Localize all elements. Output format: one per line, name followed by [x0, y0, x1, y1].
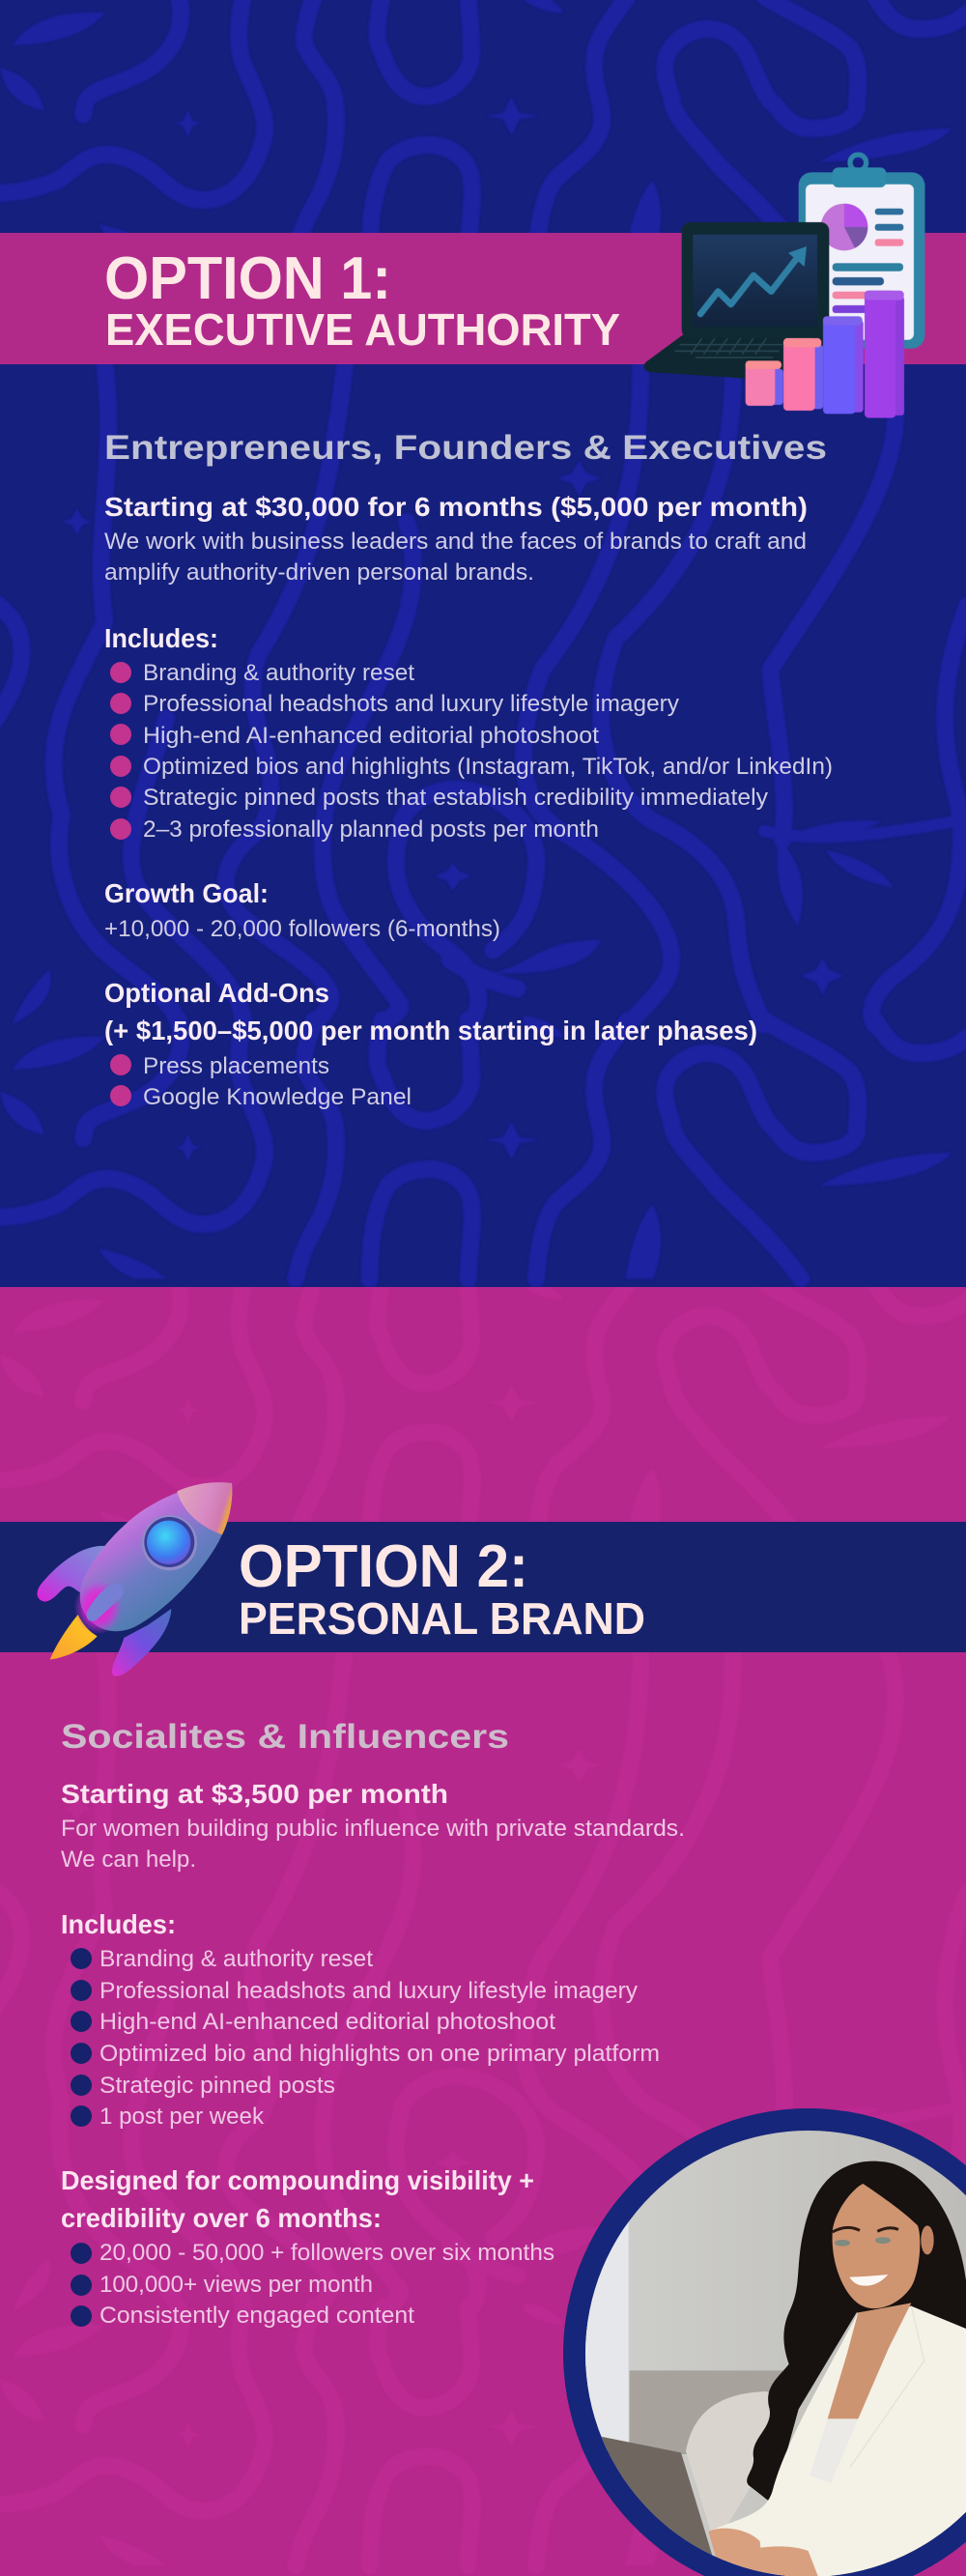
heading: executive authority: EXECUTIVE AUTHORITY [105, 304, 620, 355]
description: We can help. [61, 1846, 196, 1873]
audience heading: Entrepreneurs, Founders & Executives [104, 429, 827, 467]
laptop [643, 222, 829, 379]
bar chart [746, 291, 904, 417]
includes heading: Includes: [61, 1909, 176, 1939]
portrait photo in navy circle [563, 2108, 966, 2576]
results heading: credibility over 6 months: [61, 2203, 382, 2233]
includes list: Professional headshots and luxury lifestyle imagery [99, 1978, 638, 2004]
includes list [71, 1946, 660, 2130]
includes list: Optimized bios and highlights (Instagram, TikTok, and/or LinkedIn) [143, 754, 833, 780]
banner: option 1 [0, 233, 966, 364]
includes list: Branding & authority reset [99, 1946, 373, 1972]
description [104, 529, 807, 586]
includes list: High-end AI-enhanced editorial photoshoot [143, 723, 599, 749]
includes list: Professional headshots and luxury lifestyle imagery [143, 691, 679, 717]
text block: option 1 details [104, 429, 833, 1110]
text block: option 2 details [61, 1718, 685, 2329]
includes list [110, 660, 833, 843]
heading: option 2: OPTION 2: [239, 1533, 528, 1600]
add-ons list [110, 1053, 412, 1110]
icon: laptop, clipboard and bar chart [643, 155, 924, 417]
includes list: Branding & authority reset [143, 660, 414, 686]
results heading [61, 2165, 534, 2233]
includes list: 1 post per week [99, 2104, 265, 2130]
description [61, 1816, 685, 1873]
panel: option 2 background [0, 1278, 966, 2576]
results list [71, 2240, 554, 2329]
includes list: Optimized bio and highlights on one primary platform [99, 2041, 660, 2067]
description: For women building public influence with private standards. [61, 1816, 685, 1842]
results list: Consistently engaged content [99, 2303, 414, 2329]
price: Starting at $3,500 per month [61, 1779, 448, 1809]
results list: 20,000 - 50,000 + followers over six months [99, 2240, 554, 2266]
clipboard [799, 155, 924, 349]
includes list: 2–3 professionally planned posts per month [143, 816, 599, 843]
add-ons heading: (+ $1,500–$5,000 per month starting in later phases) [104, 1016, 757, 1045]
add-ons heading [104, 978, 757, 1045]
icon: rocket [38, 1482, 232, 1676]
add-ons list: Google Knowledge Panel [143, 1084, 412, 1110]
add-ons heading: Optional Add-Ons [104, 978, 329, 1008]
audience heading: Socialites & Influencers [61, 1718, 509, 1756]
includes list: Strategic pinned posts [99, 2073, 335, 2099]
description: We work with business leaders and the faces of brands to craft and [104, 529, 807, 555]
heading: personal brand: PERSONAL BRAND [239, 1593, 645, 1644]
heading: option 1: OPTION 1: [104, 245, 391, 312]
price: Starting at $30,000 for 6 months ($5,000 per month) [104, 492, 808, 522]
add-ons list: Press placements [143, 1053, 329, 1079]
panel: option 1 background [0, 0, 966, 1287]
includes heading: Includes: [104, 623, 218, 653]
includes list: High-end AI-enhanced editorial photoshoot [99, 2009, 555, 2035]
results list: 100,000+ views per month [99, 2272, 373, 2298]
growth goal heading: Growth Goal: [104, 878, 269, 908]
includes list: Strategic pinned posts that establish credibility immediately [143, 785, 768, 811]
growth goal value: +10,000 - 20,000 followers (6-months) [104, 916, 500, 942]
banner: option 2 [0, 1522, 966, 1652]
description: amplify authority-driven personal brands. [104, 559, 534, 586]
results heading: Designed for compounding visibility + [61, 2165, 534, 2195]
